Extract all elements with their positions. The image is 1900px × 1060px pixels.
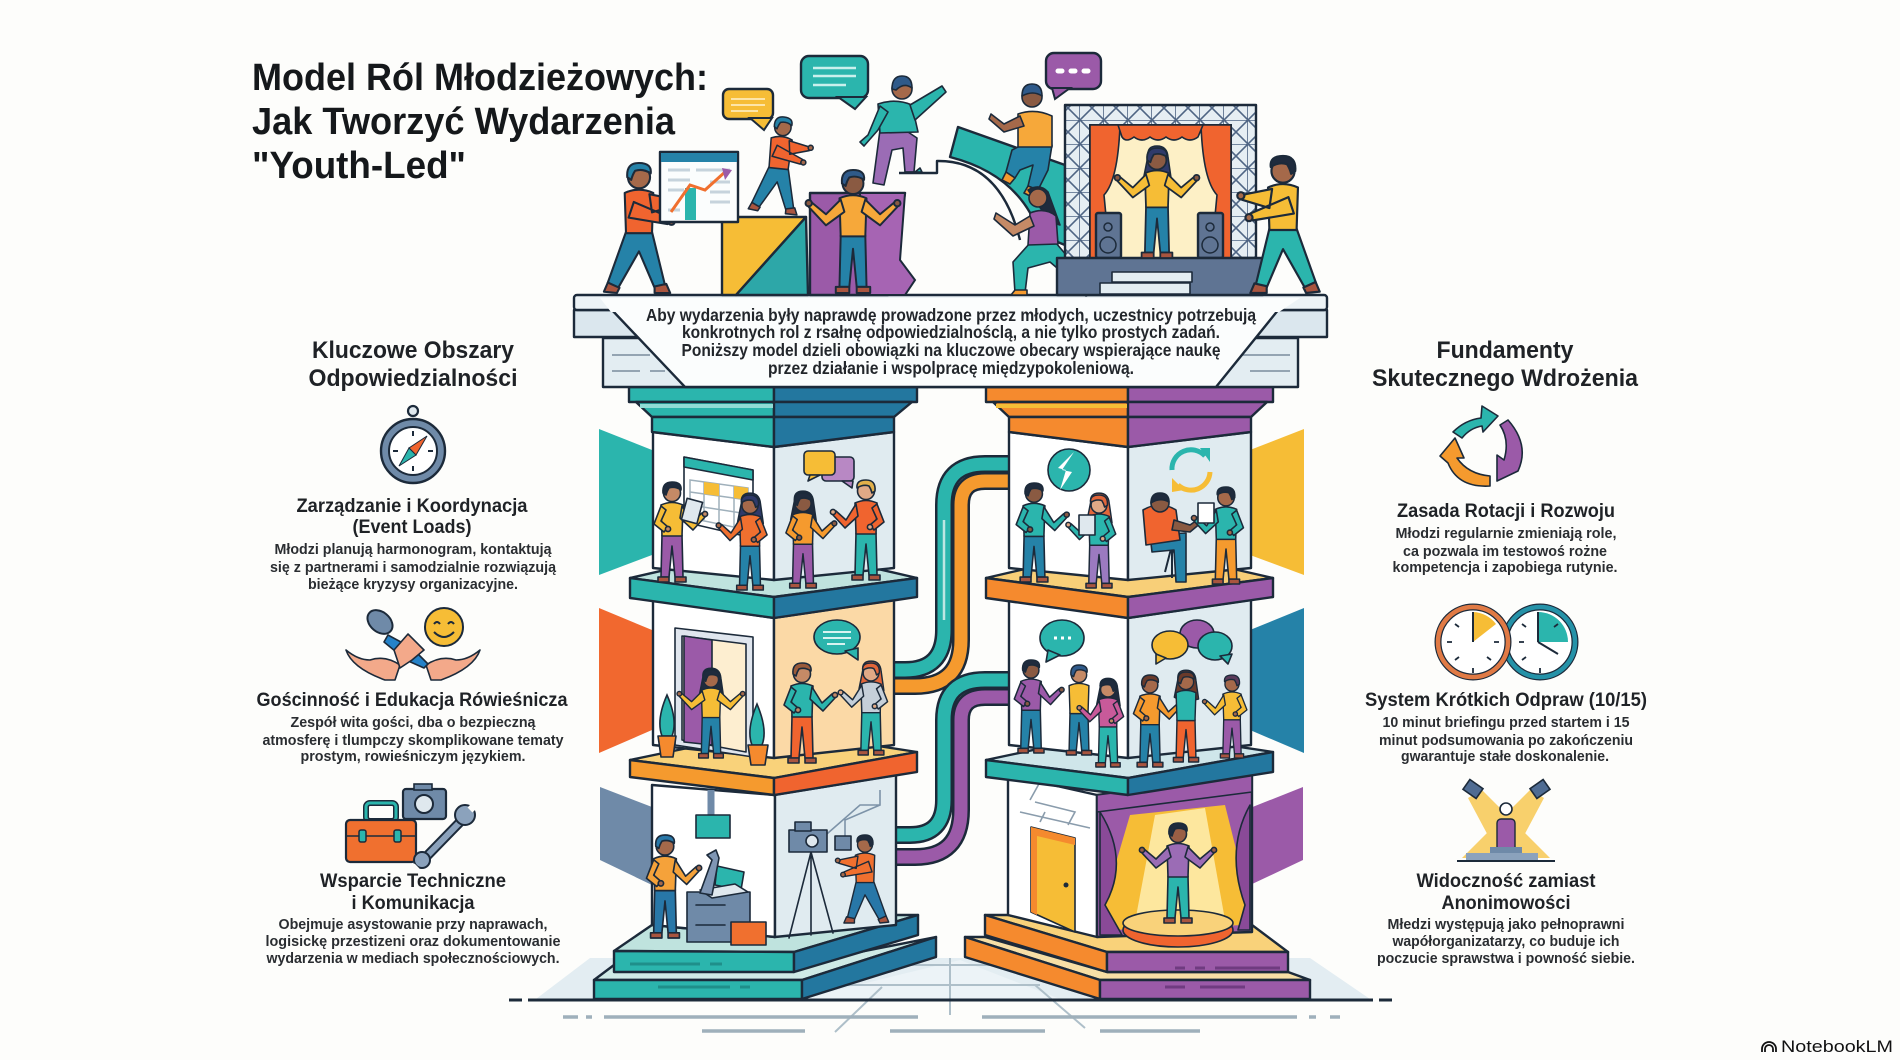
scene: icon and two colleagues [1016,449,1116,588]
scene: greeting guests at door [658,628,768,765]
title: Model Ról Młodzieżowych: [252,57,708,99]
level 2 left floor and walls [630,600,917,795]
top scene: presenter with chart board [604,152,738,293]
block: management and coordination: Młodzi planują harmonogram, kontaktują [274,542,552,558]
block: management and coordination: Zarządzanie i Koordynacja [296,495,528,517]
block: short briefing system: System Krótkich Odpraw (10/15) [1365,689,1647,711]
block: hospitality and peer education: Gościnność i Edukacja Rówieśnicza [256,689,568,711]
block: technical support and communication [266,870,560,967]
capital: left tower [629,387,917,447]
block: rotation and development: Młodzi regularnie zmieniają role, [1396,526,1616,542]
scene: peers talking with bubble [784,620,888,763]
top beam with intro text [574,295,1327,387]
scene: camera operator on tripod [789,822,889,938]
block: management and coordination: (Event Loads) [352,516,472,538]
block: short briefing system [1365,689,1647,765]
connector pipe: teal and orange [890,464,1010,686]
top scene: person with raised arm on purple block [806,170,900,293]
block: rotation and development: ca pozwala im testowoś rożne [1403,544,1607,560]
title [252,57,708,187]
top scene: person at right of stage [1237,156,1320,293]
block: technical support and communication: i Komunikacja [352,892,475,914]
left tower base and ground level [594,775,936,999]
top scene: stage with truss [1057,105,1263,295]
right column heading [1372,337,1639,392]
block: hospitality and peer education: atmosferę i tlumpczy skomplikowane tematy [262,733,564,749]
scene: discussion with chat bubbles [786,451,884,588]
intro text [646,305,1256,378]
block: rotation and development: Zasada Rotacji i Rozwoju [1397,500,1615,522]
block: visibility instead of anonymity: Młedzi występują jako pełnoprawni [1388,917,1624,933]
scene: door and spotlight stage [1031,775,1252,947]
connector pipe: teal and purple [890,680,1010,857]
block: technical support and communication: Wsparcie Techniczne [320,870,506,892]
icon: hands with microphone and smile [346,605,480,680]
level 2 right floor and walls [986,600,1273,795]
capital: right tower [986,387,1273,447]
icon: toolbox, camera and wrench [346,784,478,873]
block: visibility instead of anonymity: wapółorganizatarzy, co buduje ich [1392,934,1620,950]
NotebookLM logo: NotebookLM [1781,1037,1893,1056]
right column heading: Fundamenty [1436,337,1574,364]
block: hospitality and peer education: prostym, rowieśniczym językiem. [300,749,526,765]
icon: linked clocks [1438,607,1575,677]
block: rotation and development [1392,500,1618,576]
title: Jak Tworzyć Wydarzenia [252,101,676,143]
intro text: przez działanie i wspolpracę międzypokoleniową. [768,358,1134,378]
block: rotation and development: kompetencja i zapobiega rutynie. [1392,560,1618,576]
block: visibility instead of anonymity: poczucie sprawstwa i powność siebie. [1377,951,1635,967]
block: visibility instead of anonymity: Widoczność zamiast [1416,870,1596,892]
title: "Youth-Led" [252,145,466,187]
level 1 right floor and walls [986,432,1273,618]
block: short briefing system: 10 minut briefingu przed startem i 15 [1382,715,1630,731]
block: technical support and communication: wydarzenia w mediach społecznościowych. [266,951,560,967]
block: visibility instead of anonymity [1377,870,1635,967]
top scene: chat bubbles [723,53,1101,130]
block: visibility instead of anonymity: Anonimowości [1442,892,1570,914]
intro text: konkrotnych rol z rsałnę odpowiedzialnośclą, a nie tylko prostych zadań. [682,322,1220,342]
block: technical support and communication: logisickę przestizeni oraz dokumentowanie [266,934,560,950]
top scene: seated person on arch [989,84,1052,197]
icon: compass [381,406,445,483]
block: management and coordination: się z partnerami i samodzialnie rozwiązują [270,560,557,576]
block: management and coordination [270,495,557,593]
block: short briefing system: minut podsumowania po zakończeniu [1379,733,1633,749]
floor grid [509,958,1392,1032]
left column heading: Odpowiedzialności [308,365,518,392]
top scene: running person [994,187,1094,296]
icon: rotation arrows [1440,406,1522,486]
left column heading: Kluczowe Obszary [312,337,515,364]
intro text: Aby wydarzenia były naprawdę prowadzone przez młodych, uczestnicy potrzebują [646,305,1256,325]
right column heading: Skutecznego Wdrożenia [1372,365,1639,392]
block: management and coordination: bieżące kryzysy organizacyjne. [308,577,518,593]
block: technical support and communication: Obejmuje asystowanie przy naprawach, [278,917,548,933]
level 1 left floor and walls [630,432,917,618]
right tower base and stage level [965,775,1310,999]
block: hospitality and peer education [256,689,568,765]
scene: seated talk with refresh icon [1143,448,1243,584]
left column heading [308,337,518,392]
block: short briefing system: gwarantuje stałe doskonalenie. [1401,749,1609,765]
icon: spotlights on figure [1457,779,1555,861]
scene: group conversation [1014,620,1247,767]
block: hospitality and peer education: Zespół wita gości, dba o bezpieczną [290,715,536,731]
scene: technician with laptop [646,790,766,945]
top scene: teammate on yellow block [748,114,816,216]
side flags [599,429,1304,885]
top scene: climbing person [860,76,946,185]
scene: planning at calendar [654,457,767,590]
intro text: Poniższy model dzieli obowiązki na kluczowe obecary wspierające naukę [682,340,1221,360]
top scene: blocks and arch [722,127,1065,295]
